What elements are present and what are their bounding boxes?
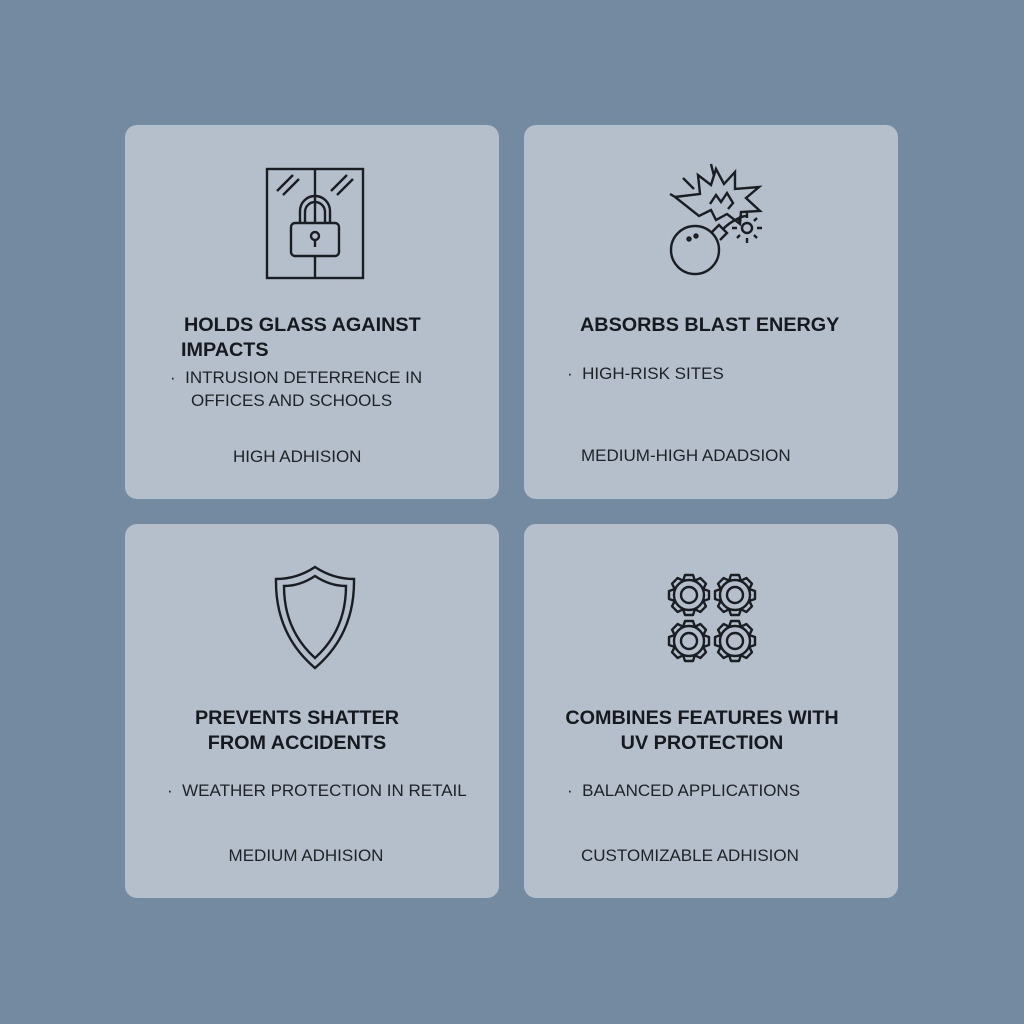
heading xyxy=(195,707,399,754)
bullet: · HIGH-RISK SITES xyxy=(567,364,724,383)
heading xyxy=(565,707,839,754)
panel: combines features xyxy=(524,524,898,898)
heading: PREVENTS SHATTER xyxy=(195,707,399,729)
icon: shield xyxy=(274,566,356,670)
heading: IMPACTS xyxy=(181,339,269,361)
icon: window lock xyxy=(266,168,364,280)
adhesion label: MEDIUM-HIGH ADADSION xyxy=(581,446,791,465)
heading xyxy=(181,314,421,361)
heading: ABSORBS BLAST ENERGY xyxy=(580,314,839,336)
icon: bomb xyxy=(670,164,763,276)
panel: absorbs blast xyxy=(524,125,898,499)
adhesion label: HIGH ADHISION xyxy=(233,447,361,466)
panel: prevents shatter xyxy=(125,524,499,898)
bullet: · WEATHER PROTECTION IN RETAIL xyxy=(167,781,467,800)
bullet xyxy=(170,368,422,410)
adhesion label: MEDIUM ADHISION xyxy=(229,846,383,865)
bullet: · INTRUSION DETERRENCE IN xyxy=(170,368,422,387)
panel: holds glass xyxy=(125,125,499,499)
heading: COMBINES FEATURES WITH xyxy=(565,707,839,729)
bullet: · BALANCED APPLICATIONS xyxy=(567,781,800,800)
heading: FROM ACCIDENTS xyxy=(208,732,386,754)
adhesion label: CUSTOMIZABLE ADHISION xyxy=(581,846,799,865)
icon: gears xyxy=(668,574,756,662)
heading: UV PROTECTION xyxy=(621,732,783,754)
bullet: OFFICES AND SCHOOLS xyxy=(191,391,392,410)
heading: HOLDS GLASS AGAINST xyxy=(184,314,421,336)
